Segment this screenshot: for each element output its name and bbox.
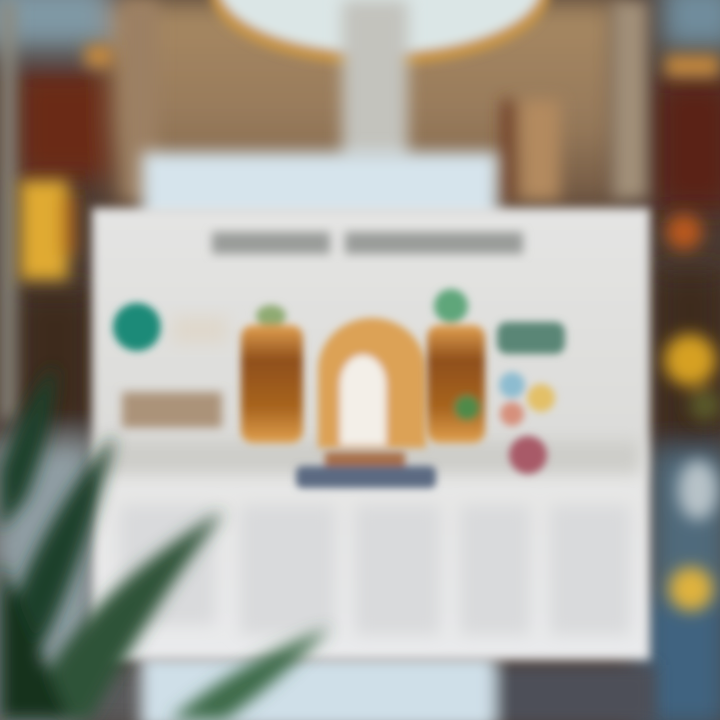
base shadow bar bbox=[296, 452, 436, 488]
icon: teal circle bbox=[113, 303, 161, 351]
left text block bbox=[172, 316, 228, 344]
columns bbox=[0, 0, 648, 420]
arch bbox=[318, 318, 426, 448]
skylight dome bbox=[210, 0, 550, 66]
panel: infographic sheet bbox=[92, 208, 650, 660]
title bbox=[212, 232, 523, 254]
tan banner bbox=[122, 392, 222, 428]
bottle left bbox=[241, 305, 303, 443]
plant leaves bbox=[0, 365, 330, 720]
panel: light upper band bbox=[142, 152, 498, 222]
bottle right bbox=[427, 289, 485, 443]
panel: lower bands bbox=[140, 655, 655, 720]
grey divider band bbox=[100, 440, 640, 474]
background lights bbox=[20, 45, 720, 611]
body text columns bbox=[120, 505, 630, 635]
coloured legend blobs bbox=[499, 372, 555, 474]
green pill label bbox=[497, 322, 565, 354]
